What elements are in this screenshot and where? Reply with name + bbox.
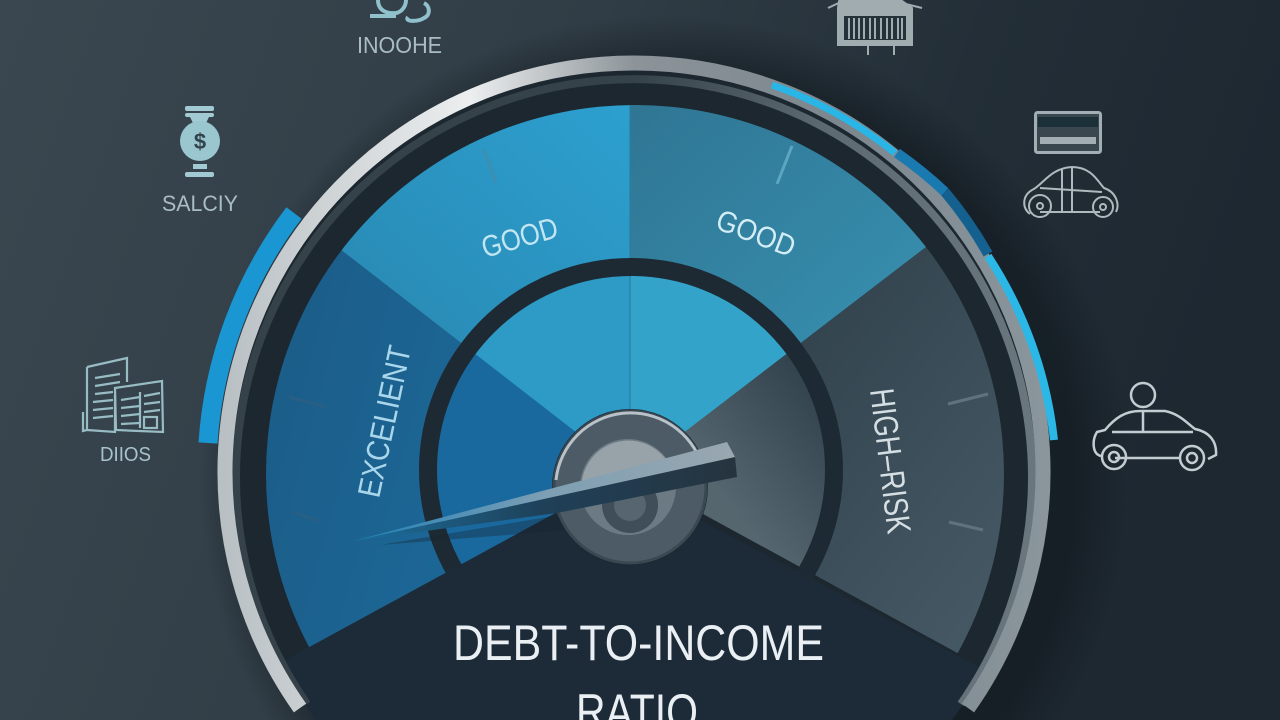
inner dial sectors <box>437 276 824 566</box>
needle shadow <box>380 488 700 545</box>
segment labels: GOOD <box>478 212 562 265</box>
gauge soft shadow <box>200 15 1130 720</box>
icon: credit card <box>1036 112 1100 152</box>
segment: good right <box>630 105 926 431</box>
segment labels: GOOD <box>711 204 800 264</box>
segment: excellent <box>266 250 575 647</box>
icon: documents: DIIOS <box>100 444 151 466</box>
icon: income <box>357 0 442 58</box>
accent arc: left <box>208 213 294 443</box>
icon: small car <box>1024 167 1118 217</box>
gauge outer ring <box>225 63 1043 708</box>
title <box>453 615 824 720</box>
inner dark ring <box>428 267 834 673</box>
gauge dial face <box>231 69 1037 720</box>
icon: documents <box>83 358 163 466</box>
title: DEBT-TO-INCOME <box>453 615 824 671</box>
hub <box>552 409 708 565</box>
gauge inner shade band <box>236 79 1032 704</box>
icon: salary: SALCIY <box>162 191 238 216</box>
tick marks <box>289 146 988 530</box>
icon: person in car <box>1094 383 1216 470</box>
icon: income: INOOHE <box>357 32 442 58</box>
segment: good left <box>342 105 630 431</box>
segment labels: HIGH–RISK <box>862 386 918 536</box>
icon: salary <box>162 106 238 216</box>
icon: salary: $ <box>194 129 206 154</box>
segment labels <box>351 204 918 536</box>
segment: high-risk <box>707 247 1004 653</box>
center dividing lines <box>629 105 631 440</box>
accent arc: upper right <box>772 85 1054 440</box>
icon: house with barcode <box>828 0 922 55</box>
segment labels: EXCELIENT <box>351 342 418 500</box>
lower dark wedge <box>286 513 978 720</box>
needle <box>353 442 737 541</box>
